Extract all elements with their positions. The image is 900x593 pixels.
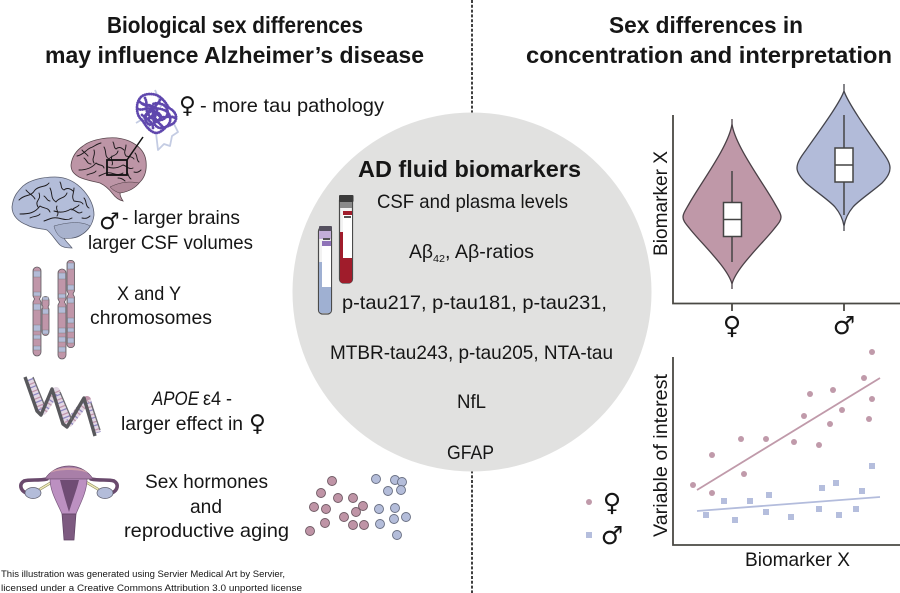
text: amyloid beta: 42 xyxy=(433,254,445,265)
icon: tau protein xyxy=(136,90,178,150)
icon: molecules xyxy=(306,474,410,540)
icon: chromosomes xyxy=(33,260,74,359)
x axis label: Biomarker X xyxy=(745,549,850,571)
icon: CSF tube xyxy=(318,226,332,314)
male regression line xyxy=(697,497,880,511)
legend: ♀ xyxy=(603,488,621,517)
text: more tau pathology: - more tau pathology xyxy=(200,95,384,117)
title: left xyxy=(45,12,424,68)
female points xyxy=(690,349,875,496)
text: MTBR and NTA tau: MTBR-tau243, p-tau205, NTA-tau xyxy=(330,342,613,364)
legend: ♂ xyxy=(601,521,623,550)
text: amyloid beta xyxy=(409,241,534,265)
title: left: Biological sex differences xyxy=(107,12,363,38)
axes xyxy=(673,115,900,311)
panel: AD fluid biomarkers circle xyxy=(292,112,652,472)
text: amyloid beta: Aβ xyxy=(409,241,433,263)
text: X and Y chromosomes: chromosomes xyxy=(90,307,212,329)
title: left: may influence Alzheimer’s disease xyxy=(45,42,424,68)
title: right: concentration and interpretation xyxy=(526,42,892,68)
chart: violin plot xyxy=(650,84,900,340)
chromosome X far right xyxy=(67,260,74,348)
text: sex hormones and reproductive aging: reproductive aging xyxy=(124,520,289,542)
callout box on brain xyxy=(107,160,127,175)
x axis labels: ♂ xyxy=(833,311,855,340)
icon: male brain xyxy=(12,177,94,248)
text: more tau pathology: ♀ xyxy=(179,93,196,119)
y axis label: Variable of interest xyxy=(650,373,672,537)
text: sex hormones and reproductive aging xyxy=(124,471,289,542)
text: NfL: NfL xyxy=(457,391,486,413)
violin: male xyxy=(797,84,890,231)
callout line to tau xyxy=(127,137,143,160)
icon: uterus and ovaries xyxy=(21,466,117,540)
x axis labels: ♀ xyxy=(723,311,741,340)
text: GFAP: GFAP xyxy=(447,442,494,464)
text: APOE effect: ε4 - xyxy=(203,388,232,410)
chromosome X right xyxy=(58,269,66,359)
chromosome Y left xyxy=(42,296,49,336)
text: larger brains and CSF volumes: - larger brains xyxy=(122,207,240,229)
footer credit: This illustration was generated using Servier Medical Art by Servier, xyxy=(1,569,285,580)
title: right: Sex differences in xyxy=(609,12,803,38)
text: larger brains and CSF volumes: ♂ xyxy=(99,209,120,235)
violin: female xyxy=(683,119,781,289)
x axis labels xyxy=(723,311,855,340)
footer credit xyxy=(1,569,302,593)
text: amyloid beta: , Aβ-ratios xyxy=(445,241,534,263)
male points xyxy=(703,463,875,523)
icon: DNA helix xyxy=(25,377,100,436)
text: sex hormones and reproductive aging: and xyxy=(190,496,222,518)
axes xyxy=(673,357,900,545)
icon: female brain xyxy=(71,137,146,201)
text: larger brains and CSF volumes: larger CSF volumes xyxy=(88,232,253,254)
text: X and Y chromosomes xyxy=(90,283,212,329)
chromosome X left xyxy=(33,267,41,356)
female regression line xyxy=(697,378,880,490)
text: CSF and plasma levels: CSF and plasma levels xyxy=(377,191,568,213)
text: p-tau species: p-tau217, p-tau181, p-tau231, xyxy=(342,292,607,314)
title: right xyxy=(526,12,892,68)
text: APOE effect xyxy=(121,388,266,437)
y axis label: Biomarker X xyxy=(650,151,672,256)
text: APOE effect: ♀ xyxy=(249,411,266,437)
legend xyxy=(586,488,623,550)
chart: scatter plot xyxy=(650,349,900,571)
text: larger brains and CSF volumes xyxy=(88,207,253,254)
text: APOE effect: APOE xyxy=(151,388,200,410)
heading: AD fluid biomarkers: AD fluid biomarkers xyxy=(358,156,581,182)
text: X and Y chromosomes: X and Y xyxy=(117,283,181,305)
icon: blood tube xyxy=(339,195,354,283)
text: sex hormones and reproductive aging: Sex hormones xyxy=(145,471,268,493)
text: APOE effect: larger effect in xyxy=(121,413,243,435)
